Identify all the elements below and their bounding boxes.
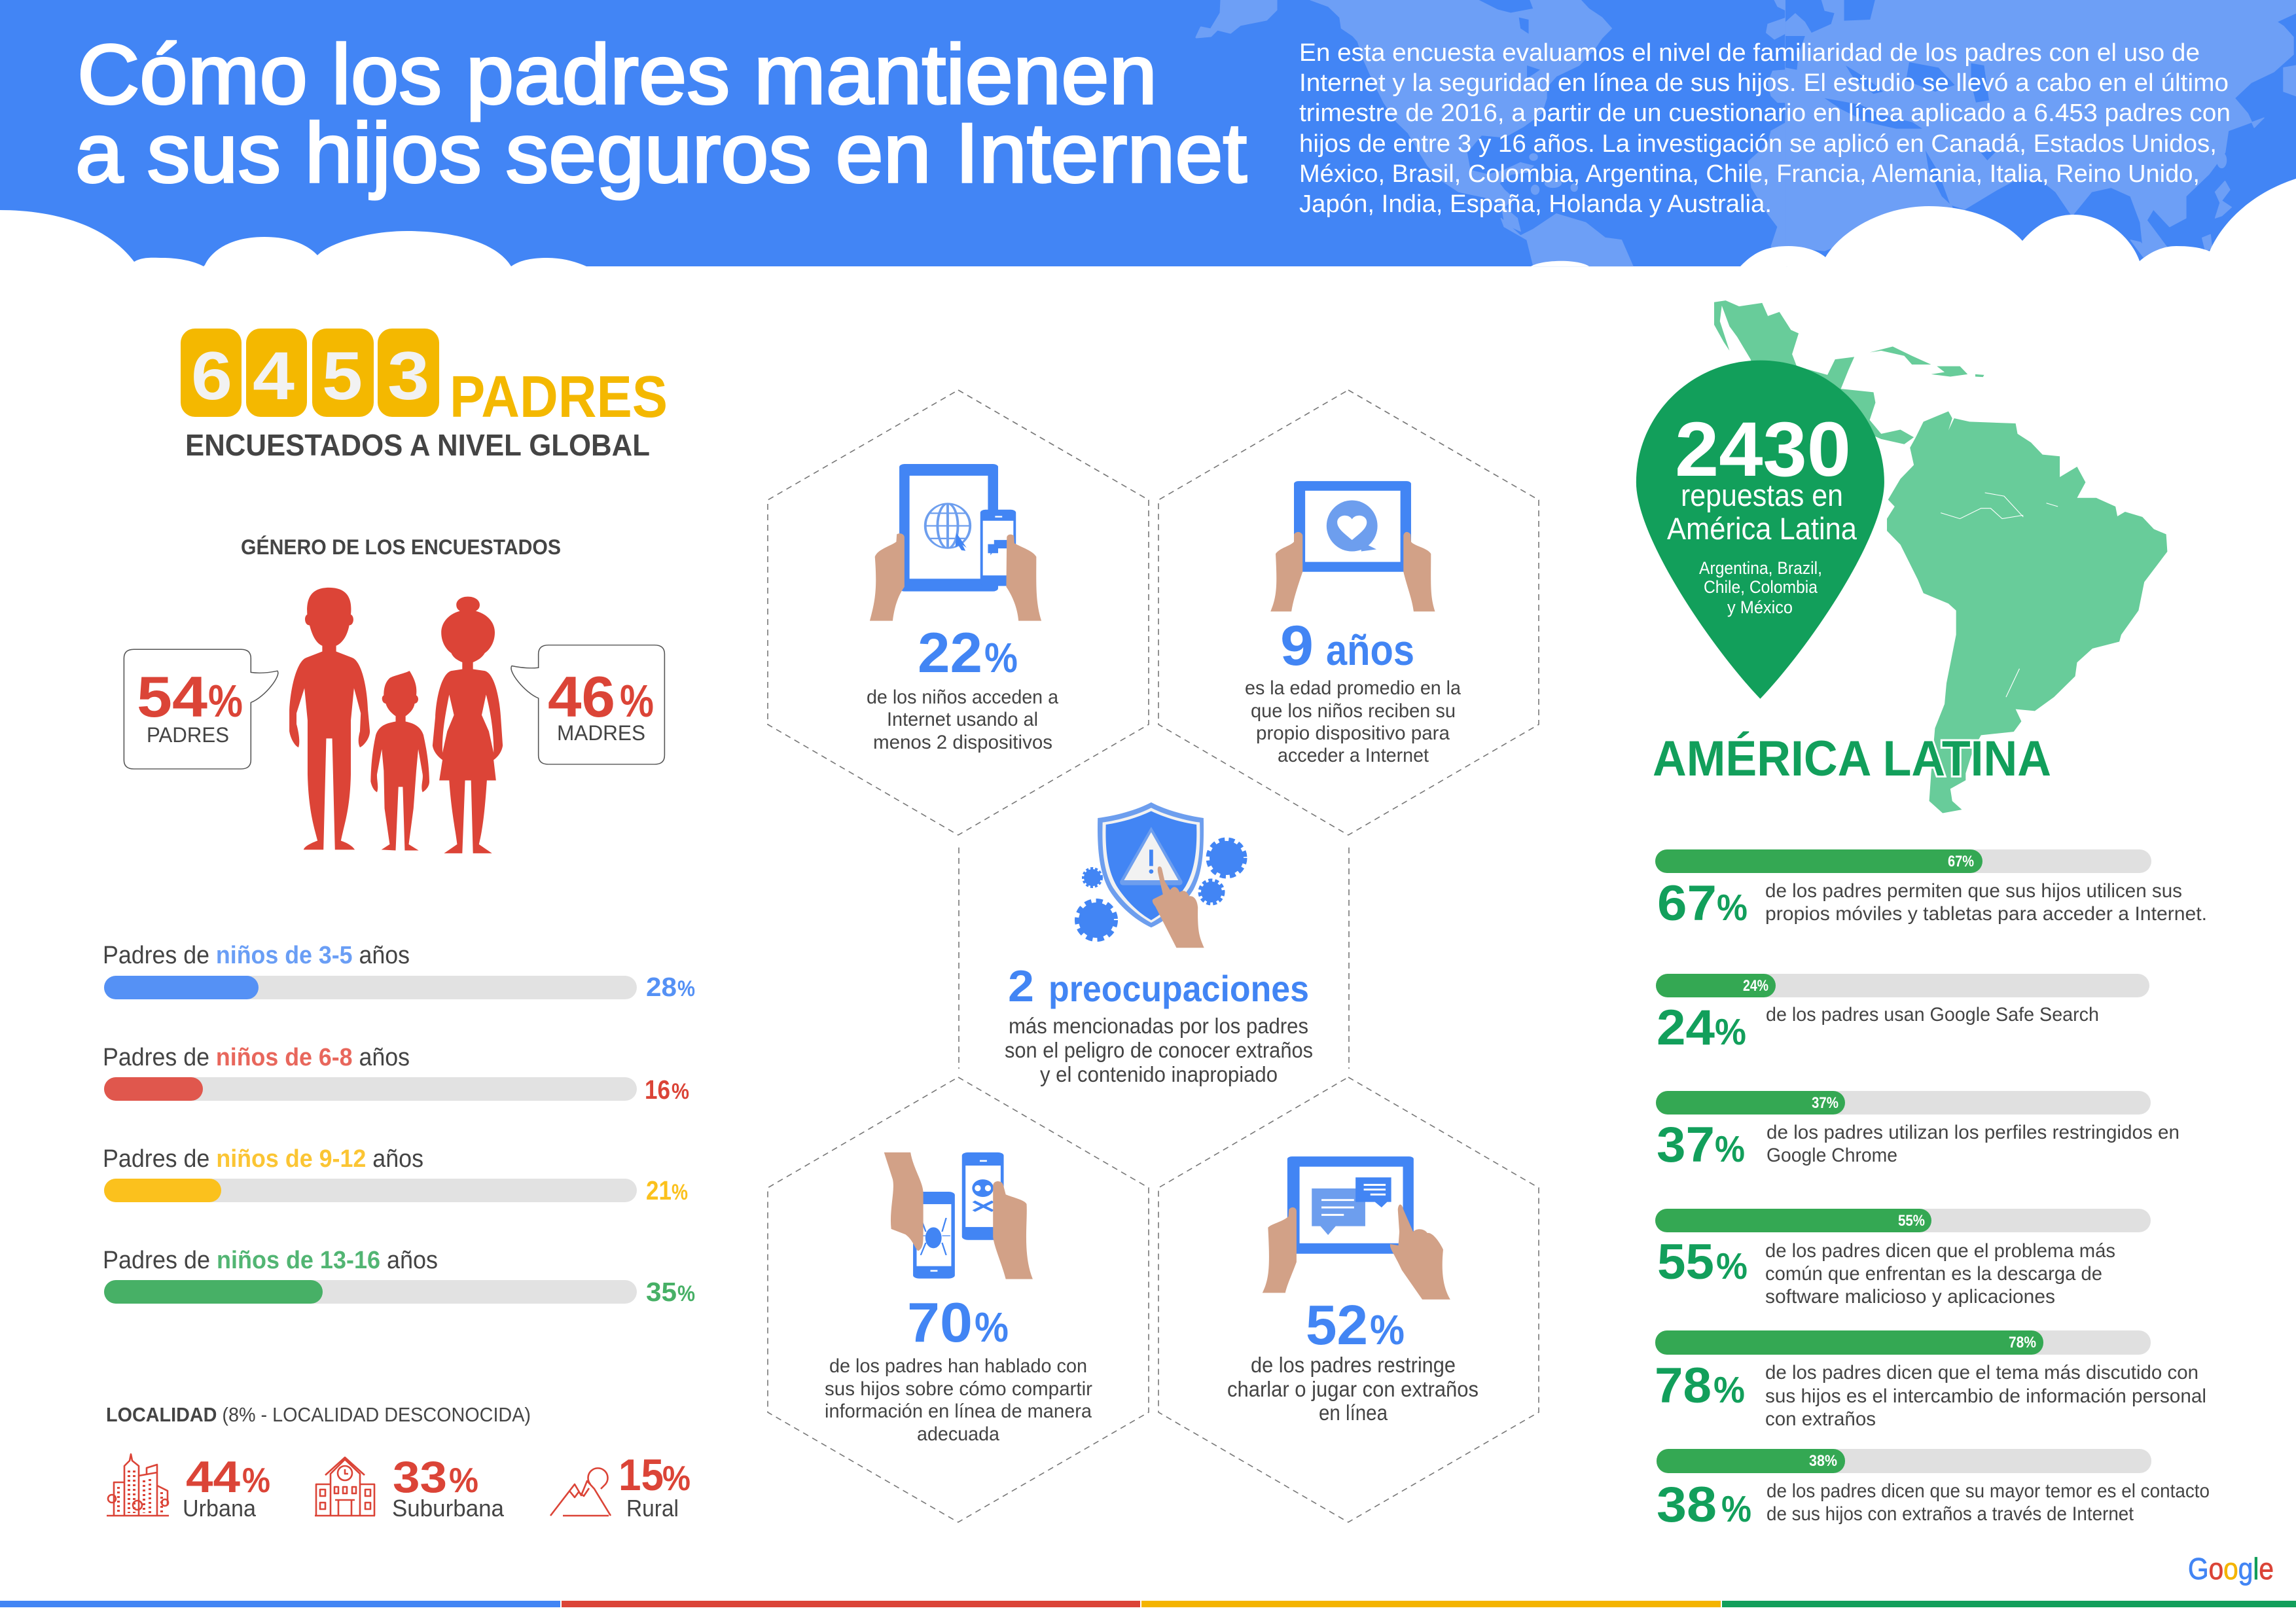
intro paragraph: Internet y la seguridad en línea de sus hijos. El estudio se llevó a cabo en el último (1299, 69, 2229, 97)
stat row: 67%: % (1717, 887, 1748, 929)
stat row: 24%: de los padres usan Google Safe Search (1766, 1004, 2099, 1026)
bar: 13-16: 35 (646, 1277, 677, 1307)
stat: rural: 15 (619, 1450, 664, 1500)
pin: 2430 respuestas: Chile, Colombia (1704, 577, 1818, 597)
stat row: 78% (1655, 1330, 2206, 1430)
gender heading: GÉNERO DE LOS ENCUESTADOS (241, 535, 561, 559)
bar: 6-8: % (672, 1079, 689, 1104)
stat: urbana: Urbana (183, 1495, 257, 1522)
bar: 6-8: 16 (645, 1075, 670, 1105)
stat row: 37%: % (1715, 1128, 1745, 1170)
stat row: 78%: % (1713, 1369, 1745, 1411)
stat row: 67%: 67 (1657, 876, 1717, 931)
counter 6453 padres: 5 (322, 338, 363, 414)
stat row: 78%: 78 (1655, 1358, 1712, 1414)
heading: América Latina: AMÉRICA LATINA (1653, 731, 2051, 787)
stat: 46% madres: % (620, 675, 654, 726)
stat row: 55%: % (1716, 1245, 1748, 1287)
bubble: padres (124, 649, 278, 769)
stat row: 37%: Google Chrome (1767, 1145, 1897, 1166)
stat row: 78%: de los padres dicen que el tema más discutido con (1765, 1362, 2198, 1383)
text: 70% description (825, 1355, 1092, 1445)
intro paragraph: Japón, India, España, Holanda y Australia. (1299, 190, 1772, 218)
stat row: 55%: común que enfrentan es la descarga de (1765, 1263, 2102, 1285)
text: 52% description: en línea (1319, 1400, 1388, 1425)
stat row: 78%: 78% (2009, 1334, 2036, 1351)
stat row: 55%: 55% (1898, 1212, 1925, 1230)
stat: 70%: 70 (907, 1292, 973, 1354)
bar: 3-5: Padres de niños de 3-5 años (103, 942, 410, 969)
stat: suburbana (392, 1452, 505, 1522)
stat: 54% padres: 54 (137, 664, 207, 729)
pin: 2430 respuestas: 2430 (1675, 406, 1851, 493)
family silhouettes (124, 588, 664, 853)
stat: 22%: % (984, 634, 1018, 681)
stat row: 67%: de los padres permiten que sus hijos utilicen sus (1765, 880, 2182, 902)
text: 9 años description: propio dispositivo para (1256, 722, 1450, 744)
counter 6453 padres: 6 (191, 338, 232, 414)
icon: mountains (550, 1468, 611, 1516)
bubble: madres (511, 645, 664, 764)
text: preocupaciones description: y el contenido inapropiado (1040, 1062, 1278, 1086)
stat: urbana (183, 1452, 270, 1522)
icon: phones with spider and skull (884, 1152, 1033, 1279)
stat: urbana: % (242, 1461, 270, 1500)
stat: suburbana: 33 (393, 1452, 447, 1502)
stat: 9 años: años (1326, 626, 1414, 674)
stat row: 55%: 55 (1657, 1234, 1714, 1290)
bar: 3-5: % (677, 976, 695, 1001)
stat: 54% padres: % (208, 675, 243, 726)
stat row: 55%: de los padres dicen que el problema más (1765, 1240, 2115, 1262)
stat row: 78%: con extraños (1765, 1408, 1876, 1430)
text: 70% description: adecuada (917, 1423, 999, 1445)
stat: 70% (907, 1292, 1009, 1354)
text: 70% description: información en línea de manera (825, 1400, 1092, 1422)
counter 6453 padres (181, 329, 668, 430)
icon: city (107, 1454, 169, 1516)
pin: 2430 respuestas: repuestas en (1681, 478, 1843, 512)
bar: 6-8: Padres de niños de 6-8 años (103, 1044, 410, 1071)
icon: tablet with heart chat (1270, 481, 1435, 611)
stat row: 67%: propios móviles y tabletas para acceder a Internet. (1765, 903, 2207, 925)
bar: 6-8 (103, 1044, 689, 1105)
bar: 9-12: Padres de niños de 9-12 años (103, 1145, 423, 1173)
text: preocupaciones description: más mencionadas por los padres (1009, 1014, 1308, 1038)
stat row: 37%: de los padres utilizan los perfiles restringidos en (1767, 1122, 2179, 1143)
bar: 13-16: Padres de niños de 13-16 años (103, 1247, 438, 1274)
clouds (0, 179, 2296, 266)
stat: urbana: 44 (186, 1452, 240, 1502)
stat: 52% (1306, 1294, 1405, 1357)
stat: rural: Rural (626, 1495, 679, 1522)
intro paragraph: México, Brasil, Colombia, Argentina, Chile, Francia, Alemania, Italia, Reino Unido, (1299, 160, 2200, 188)
stat row: 38%: de sus hijos con extraños a través de Internet (1767, 1503, 2134, 1525)
stat: 2 preocupaciones: preocupaciones (1049, 968, 1309, 1009)
stat row: 37%: 37% (1812, 1094, 1839, 1112)
stat row: 37% (1656, 1091, 2179, 1173)
stat: rural: % (662, 1459, 691, 1498)
intro paragraph (1299, 39, 2231, 218)
pin: 2430 respuestas: Argentina, Brazil, (1699, 558, 1822, 578)
bar: 9-12 (103, 1145, 688, 1205)
stat row: 67%: 67% (1948, 853, 1974, 870)
stat: 52%: % (1370, 1306, 1405, 1353)
stat row: 38%: 38 (1657, 1477, 1717, 1533)
text: preocupaciones description (1005, 1014, 1313, 1086)
text: 9 años description (1245, 677, 1461, 766)
text: 22% description (867, 687, 1058, 753)
pin: 2430 respuestas: y México (1727, 597, 1793, 617)
header band (0, 0, 2296, 266)
stat row: 55%: software malicioso y aplicaciones (1765, 1286, 2055, 1308)
stat row: 24%: % (1715, 1011, 1746, 1053)
age bars (103, 942, 695, 1307)
icon: shield with virus (1077, 802, 1245, 948)
stat: 9 años: 9 (1280, 615, 1314, 677)
panel: 52% (1158, 1077, 1539, 1522)
locality heading: LOCALIDAD (8% - LOCALIDAD DESCONOCIDA) (106, 1403, 531, 1426)
counter 6453 padres: 3 (387, 338, 429, 414)
logo: Google: Google (2188, 1552, 2274, 1586)
stat row: 37%: 37 (1657, 1117, 1715, 1173)
subtitle global: ENCUESTADOS A NIVEL GLOBAL (185, 428, 650, 462)
stat row: 38%: de los padres dicen que su mayor temor es el contacto (1767, 1480, 2210, 1502)
stat row: 67% (1655, 849, 2207, 931)
pin: 2430 respuestas (1636, 361, 1884, 699)
counter 6453 padres: PADRES (450, 365, 668, 430)
stat: 22%: 22 (918, 622, 982, 685)
counter 6453 padres: 4 (253, 338, 295, 414)
footer color bar (0, 1601, 2296, 1607)
stat: 9 años (1280, 615, 1414, 677)
stat row: 38%: % (1721, 1488, 1751, 1530)
stat: 2 preocupaciones (1008, 961, 1309, 1011)
stat: 52%: 52 (1306, 1294, 1368, 1357)
text: preocupaciones description: son el peligro de conocer extraños (1005, 1038, 1313, 1062)
stat: 2 preocupaciones: 2 (1008, 961, 1034, 1011)
text: 52% description (1227, 1353, 1479, 1425)
text: 9 años description: acceder a Internet (1278, 745, 1429, 766)
stat row: 24% (1656, 974, 2149, 1056)
text: 70% description: sus hijos sobre cómo compartir (825, 1378, 1092, 1400)
stat: 22% (918, 622, 1018, 685)
stat: rural (619, 1450, 691, 1522)
panel: 70% (768, 1077, 1149, 1522)
title: Cómo los padres mantienen (77, 27, 1157, 122)
intro paragraph: hijos de entre 3 y 16 años. La investigación se aplicó en Canadá, Estados Unidos, (1299, 130, 2217, 158)
text: 22% description: menos 2 dispositivos (873, 732, 1052, 753)
stat row: 38%: 38% (1809, 1452, 1837, 1470)
stat: 46% madres: 46 (548, 664, 615, 729)
stat: suburbana: % (449, 1461, 478, 1500)
text: 9 años description: es la edad promedio en la (1245, 677, 1461, 699)
map: Latin America (1714, 300, 2167, 813)
stat: 54% padres (137, 664, 243, 747)
bar: 9-12: 21 (646, 1175, 672, 1205)
bar: 13-16 (103, 1247, 695, 1307)
stat: 70%: % (975, 1304, 1009, 1351)
bar: 13-16: % (677, 1281, 695, 1306)
icon: tablet with chat (1263, 1156, 1450, 1300)
stat row: 24%: 24 (1657, 1000, 1715, 1056)
text: 22% description: de los niños acceden a (867, 687, 1058, 708)
pin: 2430 respuestas: América Latina (1667, 511, 1857, 546)
stat row: 38% (1657, 1449, 2210, 1533)
stat row: 55% (1655, 1209, 2151, 1308)
text: 70% description: de los padres han hablado con (829, 1355, 1087, 1377)
bar: 3-5 (103, 942, 695, 1002)
world map (1196, 0, 2296, 266)
bar: 3-5: 28 (646, 972, 677, 1002)
intro paragraph: trimestre de 2016, a partir de un cuestionario en línea aplicado a 6.453 padres con (1299, 99, 2231, 127)
icon: tablet and phone (870, 464, 1041, 621)
stat row: 78%: sus hijos es el intercambio de información personal (1765, 1385, 2206, 1407)
panel: 22% dispositivos (768, 390, 1149, 835)
text: 52% description: charlar o jugar con extraños (1227, 1377, 1479, 1401)
text: 22% description: Internet usando al (887, 709, 1038, 730)
text: 52% description: de los padres restringe (1251, 1353, 1456, 1377)
stat: 46% madres (548, 664, 654, 745)
panel: 9 años (1158, 390, 1539, 835)
stat: suburbana: Suburbana (392, 1495, 505, 1522)
stat: 46% madres: MADRES (557, 721, 645, 745)
stat row: 24%: 24% (1743, 977, 1768, 995)
stat: 54% padres: PADRES (147, 723, 229, 747)
title (75, 27, 1247, 200)
text: 9 años description: que los niños reciben su (1251, 700, 1456, 722)
intro paragraph: En esta encuesta evaluamos el nivel de familiaridad de los padres con el uso de (1299, 39, 2200, 67)
panel: 2 preocupaciones (959, 802, 1349, 1086)
icon: school (315, 1457, 375, 1516)
title: a sus hijos seguros en Internet (75, 106, 1247, 200)
bar: 9-12: % (672, 1180, 688, 1205)
